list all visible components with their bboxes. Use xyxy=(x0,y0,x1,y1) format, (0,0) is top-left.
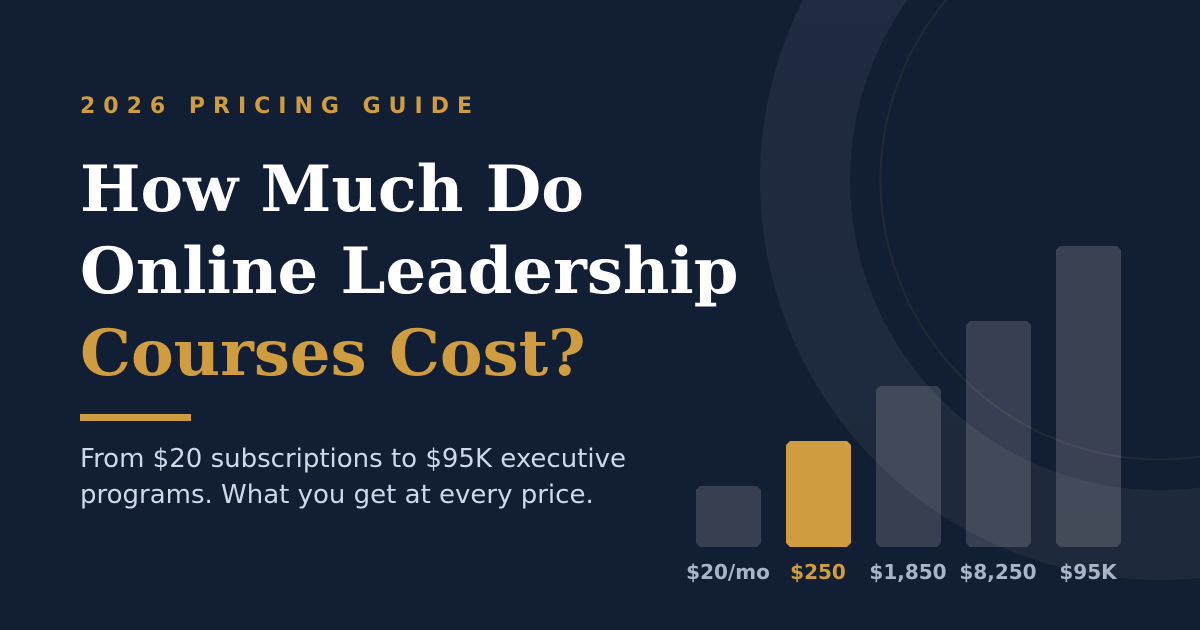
bar: $1,850 xyxy=(876,386,941,547)
label: $8,250: $8,250 xyxy=(959,560,1037,584)
eyebrow: 2026 PRICING GUIDE xyxy=(80,94,480,119)
bar chart xyxy=(696,246,1121,547)
title: Courses Cost? xyxy=(80,316,586,391)
title: How Much Do xyxy=(80,152,584,227)
subtitle xyxy=(80,444,626,510)
bar: $250 xyxy=(786,441,851,547)
bar: $8,250 xyxy=(966,321,1031,547)
title: Online Leadership xyxy=(80,234,738,309)
bar: $95K xyxy=(1056,246,1121,547)
accent divider xyxy=(80,414,191,421)
label: $1,850: $1,850 xyxy=(869,560,947,584)
label: $250: $250 xyxy=(790,560,846,584)
bar: $20/mo xyxy=(696,486,761,547)
label: $20/mo: $20/mo xyxy=(686,560,770,584)
decorative thick ring xyxy=(805,0,1200,535)
label: $95K: $95K xyxy=(1059,560,1117,584)
subtitle: programs. What you get at every price. xyxy=(80,480,594,510)
title xyxy=(80,152,738,391)
decorative thin ring xyxy=(880,0,1200,460)
subtitle: From $20 subscriptions to $95K executive xyxy=(80,444,626,474)
